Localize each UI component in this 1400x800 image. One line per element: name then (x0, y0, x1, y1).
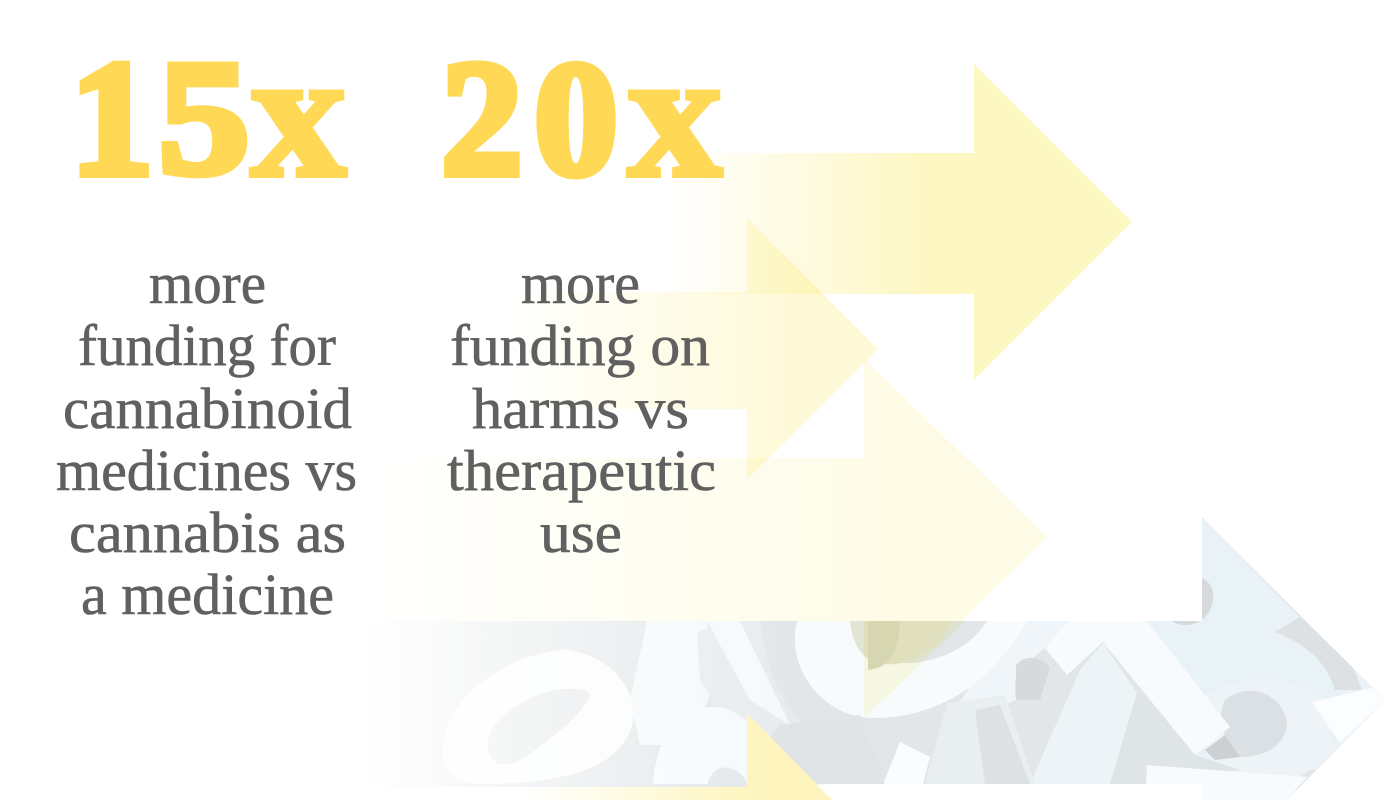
arrow: bottom yellow (520, 713, 832, 800)
text block: 15x description: more (149, 251, 266, 316)
stat: 15x (70, 15, 346, 215)
arrow: faint yellow head over photo (864, 621, 966, 718)
text block: 15x description: a medicine (81, 562, 334, 627)
small arch (653, 707, 747, 784)
bottom tile (1146, 765, 1307, 800)
crescent O (795, 621, 1027, 718)
stat: 15x: x (251, 15, 346, 215)
strokes lower middle (925, 695, 1035, 784)
arrow: bottom faint yellow (370, 358, 1047, 718)
text block: 15x description: medicines vs (56, 438, 357, 503)
text block: 20x description: funding on (450, 313, 710, 378)
text block: 15x description (56, 251, 357, 627)
stat: 20x: x (628, 14, 722, 214)
text block: 20x description: use (540, 500, 622, 565)
stat: 20x: 2 (441, 28, 522, 210)
stat: 15x: 1 (70, 26, 153, 210)
text block: 20x description: more (521, 251, 640, 316)
arrow: middle yellow (500, 218, 878, 480)
apex strokes (630, 621, 712, 745)
arrow: photo-filled letter collage (477, 517, 1385, 800)
ring letter (494, 650, 633, 784)
crescent end and hole (960, 621, 1068, 703)
A letter left leg and A top (1030, 643, 1137, 784)
arrow: top yellow (670, 64, 1132, 380)
text block: 15x description: cannabinoid (63, 376, 352, 441)
lower grey (788, 715, 885, 784)
text block: 20x description: harms vs (472, 376, 689, 441)
text block: 20x description (447, 251, 716, 565)
text block: 20x description: therapeutic (447, 438, 716, 503)
blue ring right (1147, 517, 1385, 770)
stat: 20x: 0 (534, 27, 618, 209)
tile right (1312, 688, 1385, 743)
stat: 15x: 5 (159, 28, 249, 209)
text block: 15x description: funding for (78, 313, 336, 378)
text block: 15x description: cannabis as (69, 500, 346, 565)
stat: 20x (441, 14, 722, 214)
